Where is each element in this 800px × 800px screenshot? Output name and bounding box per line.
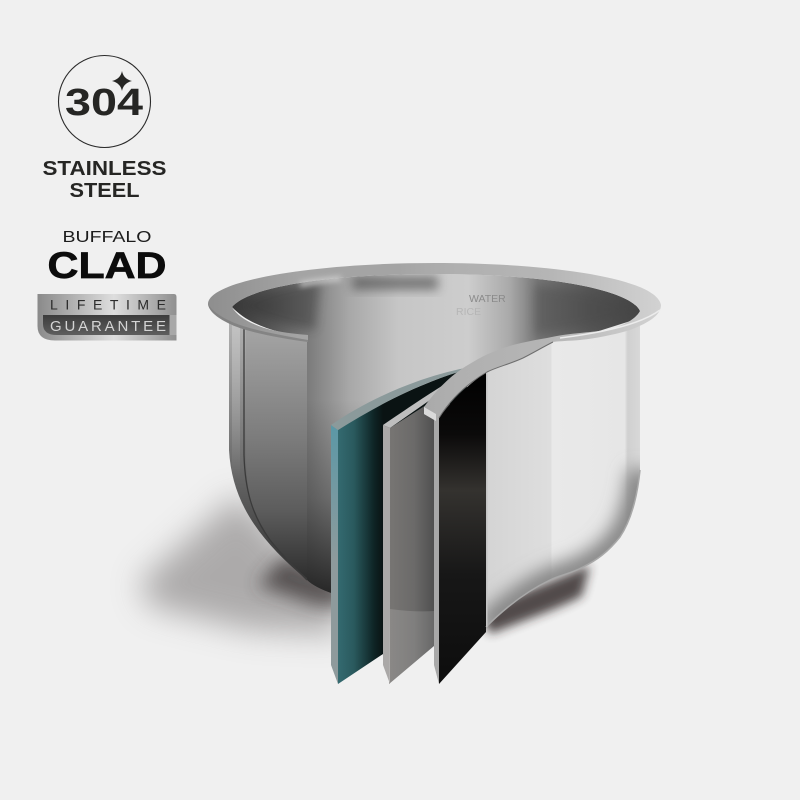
text: stainless steel: STAINLESS <box>42 158 166 180</box>
lower reflection on gray layer <box>389 609 434 684</box>
logo: buffalo clad <box>48 229 166 286</box>
black layer <box>434 372 486 684</box>
measurement markings: water and rice <box>456 293 506 318</box>
shadow under pot <box>140 495 590 634</box>
pot cut-away left outer wall <box>229 320 307 580</box>
measurement markings: water and rice: WATER <box>469 293 506 305</box>
gray layer <box>383 381 450 684</box>
logo: buffalo clad: CLAD <box>48 244 166 286</box>
logo: 304 stainless steel: STEEL <box>70 180 140 202</box>
rim <box>208 263 661 421</box>
badge: lifetime guarantee: LIFETIME <box>50 296 166 312</box>
pot <box>208 263 661 684</box>
measurement markings: water and rice: RICE <box>456 306 481 318</box>
badge: lifetime guarantee <box>38 294 176 340</box>
logo: buffalo clad: BUFFALO <box>62 229 152 246</box>
icon: 304 circle badge <box>58 56 150 148</box>
teal layer <box>331 368 470 684</box>
badge: lifetime guarantee: GUARANTEE <box>50 318 166 335</box>
stainless outer panel <box>486 318 640 627</box>
pot interior wall <box>232 274 640 593</box>
icon: 304 circle badge: 304 <box>65 82 143 124</box>
logo: 304 stainless steel <box>42 56 166 202</box>
